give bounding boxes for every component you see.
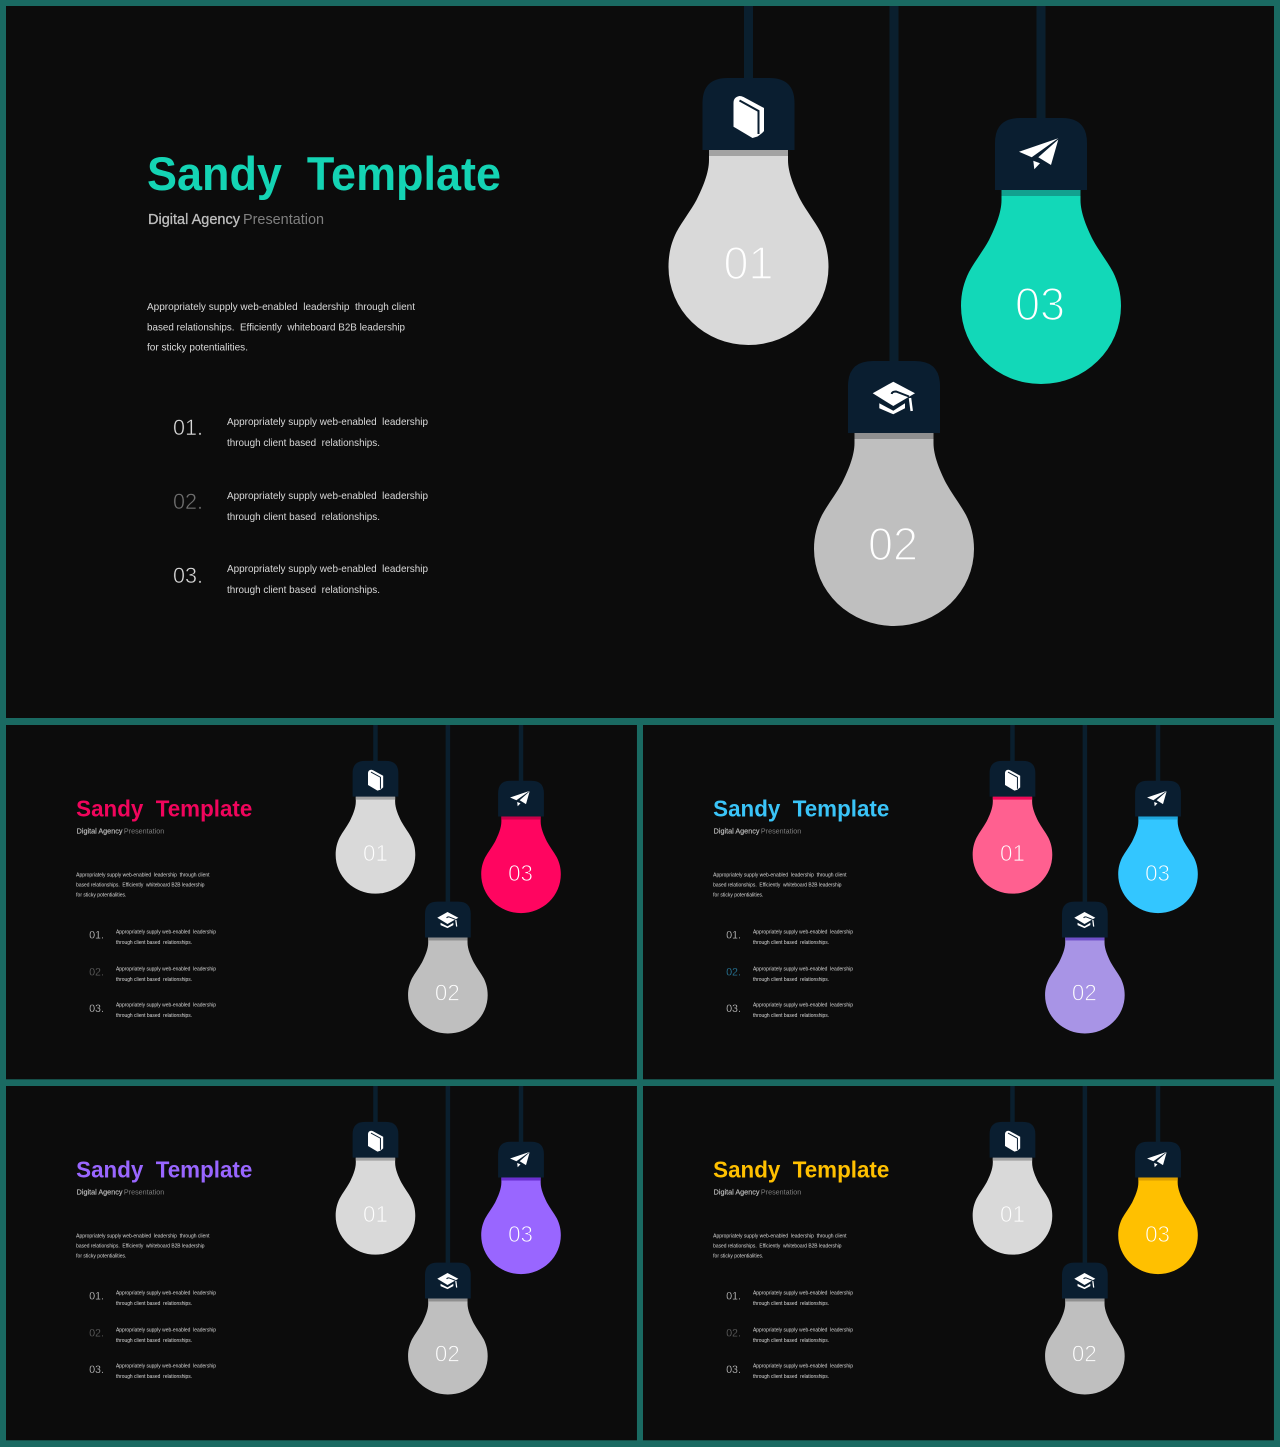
bulb 01 with book icon <box>336 725 415 894</box>
intro paragraph: based relationships. Efficiently whiteboard B2B leadership <box>713 882 842 888</box>
list item 01: through client based relationships. <box>753 940 829 946</box>
intro paragraph: based relationships. Efficiently whiteboard B2B leadership <box>147 322 405 334</box>
bulb 02 with graduation cap icon: 02 <box>1072 1341 1097 1367</box>
list item 02 <box>726 966 853 983</box>
subtitle: Digital Agency <box>77 1187 123 1196</box>
subtitle: Digital Agency <box>77 826 123 835</box>
bulb 03 with paper plane icon <box>961 6 1121 384</box>
bulb 02 with graduation cap icon <box>1045 1086 1125 1395</box>
list item 03: through client based relationships. <box>227 584 380 596</box>
bulb 03 with paper plane icon: 03 <box>508 1221 533 1247</box>
bulb 01 with book icon <box>668 6 828 345</box>
bulb 02 with graduation cap icon: 02 <box>1072 980 1097 1006</box>
panel: pink slide <box>6 725 637 1079</box>
list item 03: through client based relationships. <box>116 1013 192 1019</box>
list item 03: Appropriately supply web-enabled leadership <box>753 1364 853 1370</box>
list item 02: through client based relationships. <box>116 977 192 983</box>
subtitle: Digital Agency <box>148 211 240 228</box>
list item 01: 01. <box>726 929 741 941</box>
list item 02: Appropriately supply web-enabled leadership <box>116 966 216 972</box>
intro paragraph: Appropriately supply web-enabled leadership through client <box>713 1233 847 1239</box>
intro paragraph: Appropriately supply web-enabled leadership through client <box>147 301 415 313</box>
list item 03: 03. <box>89 1003 104 1015</box>
subtitle: Presentation <box>124 826 164 835</box>
list item 03 <box>726 1364 853 1380</box>
intro paragraph: based relationships. Efficiently whiteboard B2B leadership <box>76 882 205 888</box>
bulb 01 with book icon: 01 <box>363 840 388 866</box>
intro paragraph: Appropriately supply web-enabled leadership through client <box>76 1233 210 1239</box>
subtitle: Presentation <box>124 1187 164 1196</box>
title: Sandy Template <box>147 147 501 200</box>
bulb 03 with paper plane icon <box>1118 1086 1198 1274</box>
list item 02 <box>726 1327 853 1344</box>
list item 02: Appropriately supply web-enabled leadership <box>753 1327 853 1333</box>
intro paragraph <box>147 301 415 354</box>
list item 02 <box>89 1327 216 1344</box>
intro paragraph: for sticky potentialities. <box>76 892 126 898</box>
intro paragraph <box>713 872 847 898</box>
bulb 02 with graduation cap icon: 02 <box>435 980 460 1006</box>
subtitle: Presentation <box>761 826 801 835</box>
subtitle: Presentation <box>761 1187 801 1196</box>
bulb 02 with graduation cap icon <box>408 725 488 1034</box>
bulb 01 with book icon: 01 <box>1000 840 1025 866</box>
list item 02: through client based relationships. <box>116 1338 192 1344</box>
list item 02 <box>89 966 216 983</box>
list item 01: 01. <box>726 1290 741 1302</box>
bulb 01 with book icon: 01 <box>724 237 774 289</box>
list item 03: through client based relationships. <box>753 1013 829 1019</box>
list item 03: 03. <box>89 1364 104 1376</box>
bulb 03 with paper plane icon <box>481 725 561 913</box>
bulb 01 with book icon: 01 <box>1000 1201 1025 1227</box>
panel: amber slide <box>643 1086 1274 1440</box>
intro paragraph: Appropriately supply web-enabled leadership through client <box>713 872 847 878</box>
list item 03: Appropriately supply web-enabled leadership <box>116 1364 216 1370</box>
list item 02: 02. <box>726 1327 741 1339</box>
list item 02: 02. <box>726 966 741 978</box>
intro paragraph: for sticky potentialities. <box>713 892 763 898</box>
bulb 01 with book icon <box>973 725 1052 894</box>
bulb 01 with book icon <box>973 1086 1052 1255</box>
subtitle <box>148 211 324 228</box>
list item 03: 03. <box>726 1364 741 1376</box>
subtitle <box>77 1187 164 1196</box>
subtitle <box>77 826 164 835</box>
list item 02: 02. <box>173 489 203 514</box>
list item 01 <box>89 929 216 946</box>
bulb 01 with book icon <box>336 1086 415 1255</box>
panel: main teal slide <box>6 6 1274 718</box>
list item 02: 02. <box>89 966 104 978</box>
bulb 01 with book icon: 01 <box>363 1201 388 1227</box>
list item 01: through client based relationships. <box>116 1301 192 1307</box>
intro paragraph: Appropriately supply web-enabled leadership through client <box>76 872 210 878</box>
list item 03: Appropriately supply web-enabled leadership <box>753 1003 853 1009</box>
list item 02: 02. <box>89 1327 104 1339</box>
list item 03: 03. <box>726 1003 741 1015</box>
list item 01: Appropriately supply web-enabled leadership <box>116 929 216 935</box>
intro paragraph: based relationships. Efficiently whiteboard B2B leadership <box>76 1243 205 1249</box>
intro paragraph <box>713 1233 847 1259</box>
title: Sandy Template <box>713 796 889 822</box>
list item 02: through client based relationships. <box>753 1338 829 1344</box>
intro paragraph: for sticky potentialities. <box>147 342 248 354</box>
list item 03: 03. <box>173 563 203 588</box>
bulb 02 with graduation cap icon: 02 <box>868 518 918 570</box>
bulb 02 with graduation cap icon <box>408 1086 488 1395</box>
intro paragraph: for sticky potentialities. <box>713 1253 763 1259</box>
list item 01: Appropriately supply web-enabled leadership <box>116 1290 216 1296</box>
subtitle <box>714 1187 801 1196</box>
bulb 03 with paper plane icon <box>481 1086 561 1274</box>
list item 02: Appropriately supply web-enabled leadership <box>753 966 853 972</box>
title: Sandy Template <box>76 1157 252 1183</box>
intro paragraph: based relationships. Efficiently whiteboard B2B leadership <box>713 1243 842 1249</box>
list item 01: through client based relationships. <box>116 940 192 946</box>
list item 01 <box>726 929 853 946</box>
list item 03 <box>89 1003 216 1019</box>
subtitle: Digital Agency <box>714 826 760 835</box>
list item 03 <box>173 563 428 596</box>
list item 02: through client based relationships. <box>753 977 829 983</box>
list item 02: Appropriately supply web-enabled leadership <box>116 1327 216 1333</box>
bulb 02 with graduation cap icon: 02 <box>435 1341 460 1367</box>
list item 01: through client based relationships. <box>753 1301 829 1307</box>
list item 03: through client based relationships. <box>753 1374 829 1380</box>
list item 01 <box>173 415 428 449</box>
list item 01: Appropriately supply web-enabled leadership <box>753 1290 853 1296</box>
list item 02: Appropriately supply web-enabled leadership <box>227 490 428 502</box>
bulb 03 with paper plane icon: 03 <box>1145 860 1170 886</box>
list item 03: through client based relationships. <box>116 1374 192 1380</box>
list item 03 <box>89 1364 216 1380</box>
list item 01: Appropriately supply web-enabled leadership <box>227 416 428 428</box>
subtitle <box>714 826 801 835</box>
subtitle: Presentation <box>243 211 324 228</box>
bulb 02 with graduation cap icon <box>814 6 974 626</box>
list item 03 <box>726 1003 853 1019</box>
bulb 03 with paper plane icon: 03 <box>1145 1221 1170 1247</box>
subtitle: Digital Agency <box>714 1187 760 1196</box>
list item 01 <box>89 1290 216 1307</box>
list item 01 <box>726 1290 853 1307</box>
list item 02 <box>173 489 428 523</box>
panel: blue slide <box>643 725 1274 1079</box>
list item 03: Appropriately supply web-enabled leadership <box>227 563 428 575</box>
intro paragraph: for sticky potentialities. <box>76 1253 126 1259</box>
bulb 02 with graduation cap icon <box>1045 725 1125 1034</box>
intro paragraph <box>76 872 210 898</box>
list item 01: 01. <box>173 415 203 440</box>
list item 01: 01. <box>89 929 104 941</box>
title: Sandy Template <box>76 796 252 822</box>
intro paragraph <box>76 1233 210 1259</box>
list item 02: through client based relationships. <box>227 511 380 523</box>
bulb 03 with paper plane icon: 03 <box>1015 278 1065 330</box>
list item 01: 01. <box>89 1290 104 1302</box>
title: Sandy Template <box>713 1157 889 1183</box>
list item 03: Appropriately supply web-enabled leadership <box>116 1003 216 1009</box>
list item 01: Appropriately supply web-enabled leadership <box>753 929 853 935</box>
panel: purple slide <box>6 1086 637 1440</box>
bulb 03 with paper plane icon: 03 <box>508 860 533 886</box>
bulb 03 with paper plane icon <box>1118 725 1198 913</box>
list item 01: through client based relationships. <box>227 437 380 449</box>
